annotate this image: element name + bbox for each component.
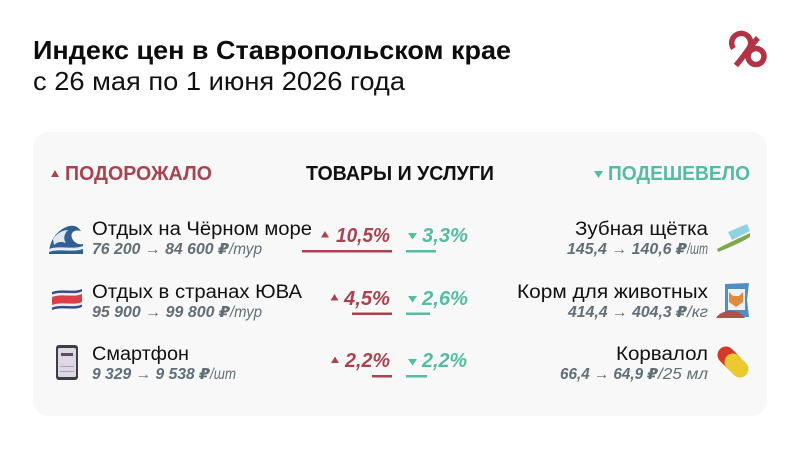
row 2 right: pet food: 414,4 → 404,3 ₽ bbox=[567, 304, 687, 321]
row 3 right: Corvalol: Корвалол bbox=[616, 344, 708, 365]
subtitle: с 26 мая по 1 июня 2026 года bbox=[33, 66, 406, 96]
heading: price rises: ПОДОРОЖАЛО bbox=[65, 163, 212, 185]
row 1 right: toothbrush: /шт bbox=[686, 241, 708, 258]
row 1 right: toothbrush: Зубная щётка bbox=[575, 219, 708, 240]
rise bar 10,5% bbox=[302, 225, 392, 252]
row 3 right: Corvalol bbox=[560, 344, 708, 383]
drop bar 2,6% bbox=[406, 288, 468, 315]
row 2 left: SE Asia holiday: 95 900 → 99 800 ₽ bbox=[92, 304, 230, 321]
row 2 right: pet food: /кг bbox=[686, 304, 708, 321]
row 1 right: toothbrush: 145,4 → 140,6 ₽ bbox=[567, 241, 687, 258]
panel: price table bbox=[33, 132, 767, 416]
heading: goods and services: ТОВАРЫ И УСЛУГИ bbox=[306, 163, 494, 185]
row 1 left: Black Sea holiday: /тур bbox=[228, 241, 262, 258]
row 2 right: pet food: Корм для животных bbox=[517, 282, 709, 303]
row 2 left: SE Asia holiday: Отдых в странах ЮВА bbox=[92, 282, 302, 303]
drop bar 2,2%: 2,2% bbox=[421, 350, 467, 372]
row 2 right: pet food bbox=[517, 282, 709, 321]
drop bar 3,3% bbox=[406, 225, 468, 252]
rise bar 4,5%: 4,5% bbox=[343, 288, 390, 310]
icon: toothbrush bbox=[717, 224, 750, 252]
icon: smartphone bbox=[56, 345, 78, 380]
rise bar 4,5% bbox=[330, 288, 392, 315]
rise bar 2,2%: 2,2% bbox=[344, 350, 390, 372]
drop bar 2,6%: 2,6% bbox=[421, 288, 468, 310]
icon: Costa Rica flag bbox=[52, 289, 82, 310]
row 1 left: Black Sea holiday: 76 200 → 84 600 ₽ bbox=[92, 241, 229, 258]
icon: wave bbox=[49, 226, 83, 254]
icon: pill bbox=[726, 355, 740, 369]
logo: 26 bbox=[732, 33, 764, 66]
row 3 left: smartphone bbox=[92, 344, 236, 383]
title: Индекс цен в Ставропольском крае bbox=[33, 35, 511, 65]
heading: price drops: ПОДЕШЕВЕЛО bbox=[608, 163, 750, 185]
row 3 left: smartphone: 9 329 → 9 538 ₽ bbox=[92, 366, 210, 383]
row 2 left: SE Asia holiday bbox=[92, 282, 302, 321]
row 3 right: Corvalol: /25 мл bbox=[657, 366, 708, 383]
row 3 left: smartphone: /шт bbox=[209, 366, 236, 383]
row 1 right: toothbrush bbox=[567, 219, 708, 258]
drop bar 3,3%: 3,3% bbox=[422, 225, 468, 247]
row 3 left: smartphone: Смартфон bbox=[92, 344, 189, 365]
drop bar 2,2% bbox=[406, 350, 467, 378]
icon: pet food bag bbox=[716, 283, 749, 318]
row 1 left: Black Sea holiday bbox=[92, 219, 312, 258]
row 2 left: SE Asia holiday: /тур bbox=[229, 304, 262, 321]
row 1 left: Black Sea holiday: Отдых на Чёрном море bbox=[92, 219, 312, 240]
rise bar 10,5%: 10,5% bbox=[336, 225, 390, 247]
rise bar 2,2% bbox=[331, 350, 392, 378]
row 3 right: Corvalol: 66,4 → 64,9 ₽ bbox=[560, 366, 658, 383]
